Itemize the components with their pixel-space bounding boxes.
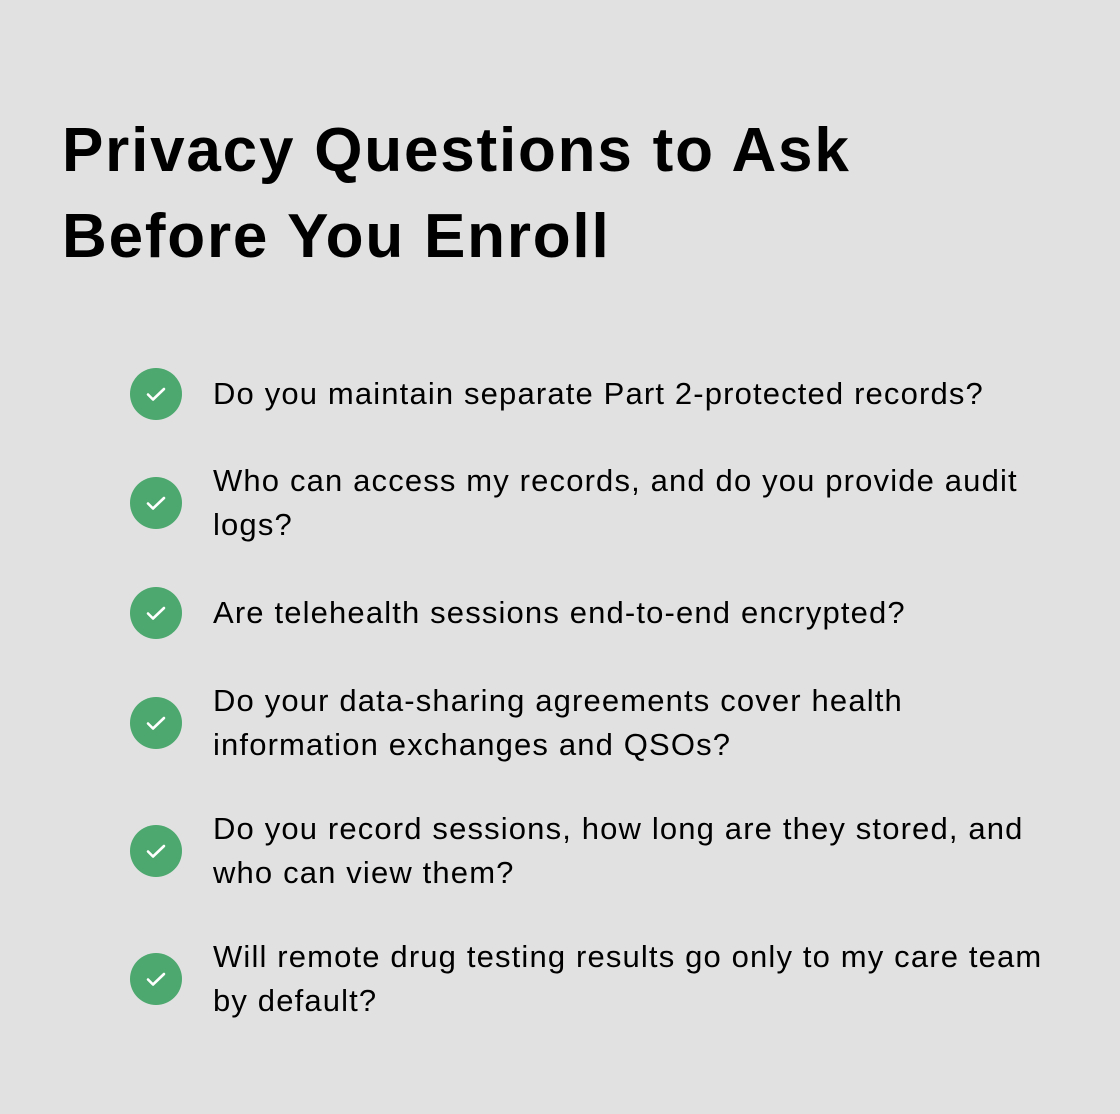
item 2: logs? [213, 507, 293, 542]
item 5: Do you record sessions, how long are they stored, and [213, 811, 1024, 846]
item 2: Who can access my records, and do you provide audit [213, 463, 1018, 498]
item 1 [130, 368, 984, 420]
icon: check [130, 825, 182, 877]
item 4: Do your data-sharing agreements cover health [213, 683, 903, 718]
item 6: by default? [213, 983, 377, 1018]
item 5 [130, 811, 1024, 890]
icon: check [130, 477, 182, 529]
item 3 [130, 587, 906, 639]
title [62, 116, 851, 271]
icon: check [130, 953, 182, 1005]
item 2 [130, 463, 1018, 542]
icon: check [130, 697, 182, 749]
item 5: who can view them? [213, 855, 515, 890]
item 6: Will remote drug testing results go only to my care team [213, 939, 1042, 974]
item 1: Do you maintain separate Part 2-protected records? [213, 376, 984, 411]
icon: check [130, 368, 182, 420]
item 3: Are telehealth sessions end-to-end encrypted? [213, 595, 906, 630]
icon: check [130, 587, 182, 639]
item 4: information exchanges and QSOs? [213, 727, 731, 762]
item 6 [130, 939, 1042, 1018]
title: Before You Enroll [62, 202, 610, 271]
title: Privacy Questions to Ask [62, 116, 851, 185]
item 4 [130, 683, 903, 762]
